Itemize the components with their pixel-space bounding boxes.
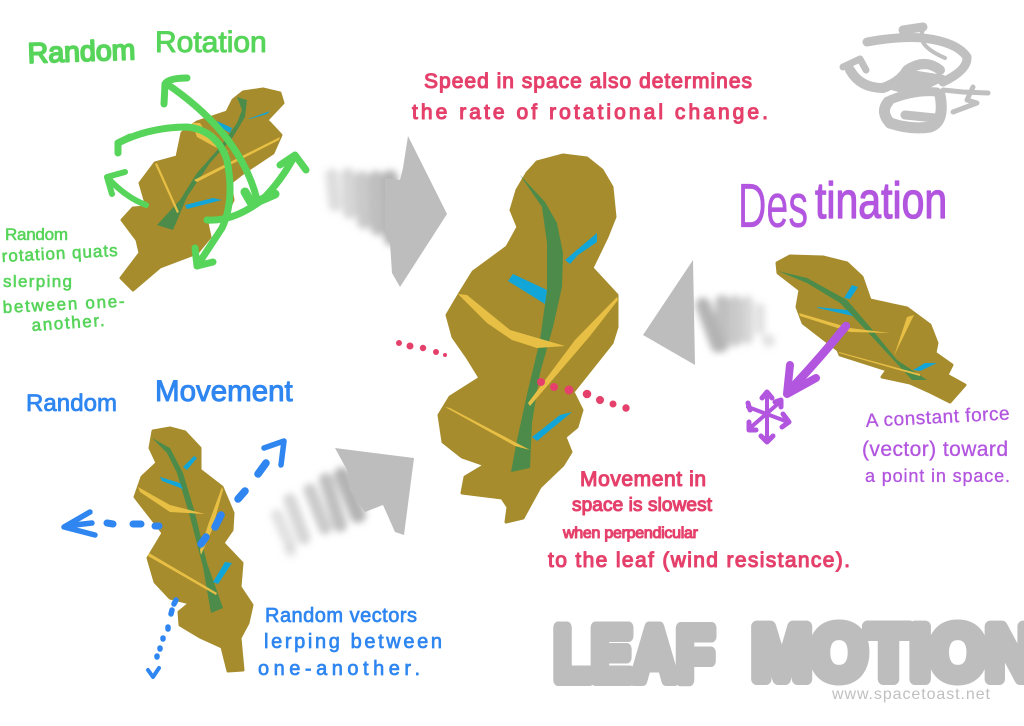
heading: random rotation: Rotation <box>155 26 267 59</box>
text: rotation note: slerping <box>3 272 72 291</box>
heading: random movement: Movement <box>155 375 293 408</box>
text: movement in space note: when perpendicular <box>562 525 699 542</box>
arrows: rotation arcs <box>107 78 306 266</box>
leaf: destination leaf <box>777 256 965 402</box>
heading: destination <box>738 172 947 241</box>
icon: destination target star <box>748 392 789 442</box>
text: speed note: Speed in space also determines <box>424 70 752 93</box>
text: movement note <box>258 605 442 680</box>
heading: random rotation: Random <box>27 34 136 70</box>
icon: gray scribble <box>843 27 988 128</box>
text: destination note: a point in space. <box>865 466 1010 486</box>
text: rotation note <box>1 225 125 335</box>
heading: random movement <box>26 375 293 417</box>
leaf: central leaf <box>439 155 618 522</box>
leaf: green-panel leaf <box>121 89 283 290</box>
panel: random movement <box>26 375 442 680</box>
text: website credit: www.spacetoast.net <box>831 686 991 703</box>
text: rotation note: rotation quats <box>1 241 118 266</box>
title: leaf motion: LEAF <box>554 612 714 697</box>
text: movement in space note <box>548 468 850 572</box>
dotted line: perpendicular axis <box>396 340 630 412</box>
heading: destination: tination <box>815 172 947 229</box>
heading: random movement: Random <box>26 390 117 417</box>
text: rotation note: between one- <box>2 292 125 317</box>
arrow: dashed up-right vector <box>201 441 284 544</box>
text: movement note: one-another. <box>258 658 420 680</box>
heading: random rotation <box>27 26 267 70</box>
arrow: gray arrow from rotation to centre <box>332 136 447 287</box>
leaf: blue-panel leaf <box>135 428 252 671</box>
title: leaf motion <box>554 611 1024 697</box>
heading: destination: Des <box>738 172 808 241</box>
arrow: constant force vector <box>787 326 846 394</box>
text: movement in space note: space is slowest <box>572 495 713 516</box>
text: rotation note: another. <box>31 311 105 335</box>
text: destination note <box>862 403 1010 486</box>
text: speed note: the rate of rotational change. <box>412 101 768 124</box>
panel: random rotation <box>1 26 306 335</box>
text: destination note: (vector) toward <box>862 438 1008 461</box>
text: movement in space note: to the leaf (wind resistance). <box>548 549 850 572</box>
text: rotation note: Random <box>5 225 68 244</box>
arrow: dotted down vector <box>148 600 176 677</box>
text: speed note <box>412 70 768 124</box>
text: movement in space note: Movement in <box>580 468 706 491</box>
text: destination note: A constant force <box>865 403 1010 432</box>
arrow: gray arrow from movement to centre <box>277 448 414 552</box>
text: movement note: lerping between <box>264 631 442 653</box>
text: movement note: Random vectors <box>265 605 417 627</box>
arrow: gray arrow from destination to centre <box>643 260 769 365</box>
arrow: dashed left vector <box>64 512 159 535</box>
